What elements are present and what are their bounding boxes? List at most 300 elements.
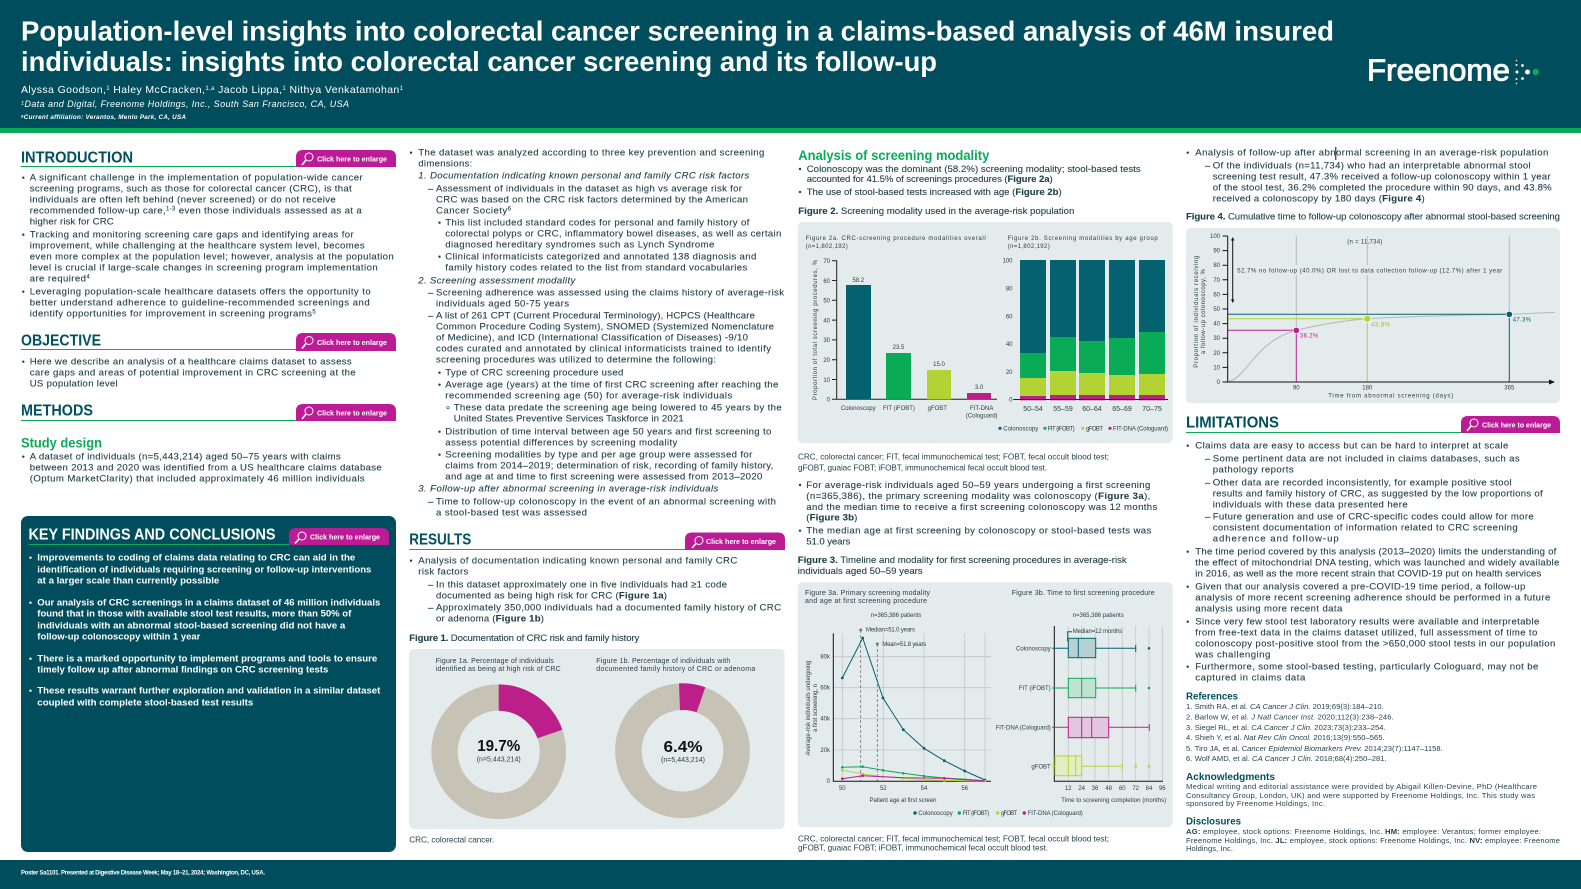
text: methods continued: Screening modalities by type and per age group were assessed for <box>445 450 753 461</box>
line chart: cumulative follow-up: 47.3% <box>1513 317 1532 323</box>
text: disclosures: AG: employee, stock options: Freenome Holdings, Inc. HM: employee: Verantos; former employee: <box>1186 827 1541 836</box>
line chart: cumulative follow-up: 40 <box>1213 322 1221 328</box>
authors: Nithya Venkatamohan <box>286 84 399 96</box>
note: figure 2 abbreviations <box>798 453 1109 472</box>
text: results bullets: or adenoma (Figure 1b) <box>436 614 544 625</box>
text: methods continued: recommended screening age (50) for average-risk individuals <box>445 391 733 402</box>
bar chart: figure 2a: 23.5 <box>893 345 905 351</box>
button: click here to enlarge (objective) <box>296 333 396 351</box>
text: limitations bullets: Future generation and use of CRC-specific codes could allow for more <box>1213 512 1534 523</box>
text: methods continued: screening procedures was utilized to determine the following: <box>436 355 716 366</box>
bar chart: figure 2a: 0 <box>827 398 831 404</box>
button: click here to enlarge (results) <box>685 532 785 550</box>
bar chart: figure 2a: 40 <box>823 318 831 324</box>
text: disclosures: Freenome Holdings, Inc. JL: employee, stock options: Freenome Holdings, Inc. NV: employee: Freenome <box>1186 836 1560 845</box>
text: limitations bullets: – <box>1205 512 1211 523</box>
line chart: figure 3a: Average-risk individuals undergoing <box>806 660 812 756</box>
caption: figure 1: Figure 1. Documentation of CRC risk and family history <box>409 633 640 644</box>
text: limitations bullets: – <box>1205 454 1211 465</box>
box plot: figure 3b <box>996 626 1166 804</box>
box plot: figure 3b: 24 <box>1078 786 1086 792</box>
line chart: cumulative follow-up: 60 <box>1213 292 1221 298</box>
text: limitations bullets: – <box>1205 478 1211 489</box>
subtitle: figure 2a <box>806 236 986 250</box>
caption: figure 4: Figure 4. Cumulative time to follow-up colonoscopy after abnormal stool-based screening <box>1186 212 1560 223</box>
text: introduction bullets: even those individuals assessed as at a <box>176 206 362 217</box>
note: figure 3 abbreviations: CRC, colorectal cancer; FIT, fecal immunochemical test; FOBT, fecal occult blood test; <box>798 834 1109 843</box>
text: key findings bullets: These results warrant further exploration and validation in a similar dataset <box>37 686 381 697</box>
text: introduction bullets: Tracking and monitoring screening care gaps and identifying areas for <box>30 230 354 241</box>
text: reference list: 1. <box>1186 702 1192 711</box>
text: key findings bullets: identification of individuals requiring screening or follow-up interventions <box>37 565 371 576</box>
text: key findings bullets: individuals with an abnormal stool-based screening did not have a <box>37 621 346 632</box>
text: methods continued: – <box>428 311 434 322</box>
title: individuals: insights into colorectal cancer screening and its follow-up <box>21 46 937 77</box>
text: methods continued: Clinical informaticists categorized and annotated 138 diagnosis and <box>445 252 756 263</box>
text: results bullets: – <box>428 603 434 614</box>
line chart: figure 3a: 54 <box>921 786 928 792</box>
text: methods continued: CRC was based on the CRC risk factors determined by the American <box>436 195 748 206</box>
button: click here to enlarge (results): Click here to enlarge <box>706 539 776 546</box>
box plot: figure 3b: 84 <box>1146 786 1153 792</box>
line chart: cumulative follow-up: 100 <box>1210 234 1221 240</box>
line chart: figure 3a: Mean=51.8 years <box>882 642 926 648</box>
donut chart: figure 1a: (n=5,443,214) <box>477 756 521 764</box>
text: methods continued: individuals aged 50-75 years <box>436 299 569 310</box>
legend: figure 3: Colonoscopy <box>918 811 953 817</box>
panel: key findings and conclusions <box>21 516 396 852</box>
line chart: figure 3a: 56 <box>961 786 969 792</box>
bar chart: figure 2a: 15.0 <box>933 362 945 368</box>
legend: figure 2: FIT-DNA (Cologuard) <box>1113 426 1168 432</box>
line chart: cumulative follow-up: 90 <box>1293 386 1300 392</box>
stacked bar chart: figure 2b: 40 <box>1006 342 1013 348</box>
text: follow-up bullets: Of the individuals (n=11,734) who had an interpretable abnormal stool <box>1213 161 1531 172</box>
stacked bar chart: figure 2b: 65–69 <box>1112 406 1132 413</box>
text: limitations bullets: adherence and follow-up <box>1213 534 1339 545</box>
text: reference list: 4. <box>1186 733 1192 742</box>
line chart: cumulative follow-up: 50 <box>1213 307 1221 313</box>
text: methods continued: dimensions: <box>418 159 472 170</box>
text: key findings bullets <box>29 553 381 709</box>
heading: Objective: OBJECTIVE <box>21 333 101 350</box>
text: introduction bullets: better understand adherence to guideline-recommended screenings and <box>30 298 370 309</box>
footer citation: Poster Sa1101. Presented at Digestive Disease Week; May 18–21, 2024; Washington, DC, USA. <box>21 870 265 876</box>
subheading: Analysis of screening modality: Analysis of screening modality <box>798 148 990 163</box>
legend: figure 3: gFOBT <box>1001 811 1017 817</box>
text: follow-up bullets <box>1186 147 1552 205</box>
box plot: figure 3b: Colonoscopy <box>1016 646 1051 652</box>
header banner <box>0 0 1581 133</box>
subtitle: figure 2a: (n=1,802,192) <box>806 244 848 250</box>
line chart: cumulative follow-up: 80 <box>1213 263 1221 269</box>
stacked bar chart: figure 2b: 60 <box>1006 314 1013 320</box>
text: limitations bullets: results and family history of CRC, as suggested by the low proportions of <box>1213 489 1543 500</box>
text: results bullets: documented as being high risk for CRC (Figure 1a) <box>436 591 667 602</box>
subtitle: figure 1a: identified as being at high risk of CRC <box>436 666 561 673</box>
note: figure 1 abbreviations: CRC, colorectal cancer. <box>409 835 494 844</box>
text: disclosures <box>1186 827 1560 853</box>
authors: Haley McCracken, <box>110 84 205 96</box>
heading: Introduction: INTRODUCTION <box>21 150 133 166</box>
subtitle: figure 1b: Figure 1b. Percentage of individuals with <box>596 658 730 665</box>
heading: key findings: KEY FINDINGS AND CONCLUSIONS <box>28 526 276 544</box>
text: introduction bullets: 1-3 <box>166 207 176 213</box>
box plot: figure 3b: FIT (iFOBT) <box>1019 686 1051 692</box>
box plot: figure 3b: gFOBT <box>1031 764 1051 770</box>
box plot: figure 3b: FIT-DNA (Cologuard) <box>996 725 1051 731</box>
text: methods continued: assess potential differences by screening modality <box>445 438 678 449</box>
stacked bar chart: figure 2b: 55–59 <box>1053 406 1073 413</box>
text: methods continued: Screening adherence was assessed using the claims history of average-risk <box>436 288 784 299</box>
line chart: cumulative follow-up: Proportion of individuals receiving <box>1194 256 1200 368</box>
line chart: figure 3a: Median=51.0 years <box>866 628 915 634</box>
text: methods continued: 6 <box>508 207 512 213</box>
caption: figure 3: Figure 3. Timeline and modality for first screening procedures in average-risk <box>798 555 1127 566</box>
line chart: figure 3a: a first screening, n <box>813 684 819 732</box>
box plot: figure 3b: Median=12 months <box>1073 629 1122 635</box>
bar chart: figure 2a: FIT (iFOBT) <box>883 406 915 412</box>
donut chart: figure 1b <box>628 683 737 805</box>
text: limitations bullets: The time period covered by this analysis (2013–2020) limits the understanding of <box>1195 547 1557 558</box>
heading: Results: RESULTS <box>409 532 472 549</box>
subtitle: figure 1a <box>436 658 561 673</box>
text: limitations bullets: Given that our analysis covered a pre-COVID-19 time period, a follow-up <box>1195 582 1525 593</box>
heading: Disclosures: Disclosures <box>1186 816 1241 828</box>
text: reference list <box>1186 702 1443 763</box>
bar chart: figure 2a: 50 <box>823 298 831 304</box>
bar chart: figure 2a: 20 <box>823 358 831 364</box>
subtitle: figure 1a: Figure 1a. Percentage of individuals <box>436 658 554 665</box>
box plot: figure 3b: 36 <box>1092 786 1099 792</box>
text: reference list: Tiro JA, et al. Cancer Epidemiol Biomarkers Prev. 2014;23(7):1147–1158. <box>1195 744 1443 753</box>
text: limitations bullets: the effect of mitochondrial DNA testing, which was launched and widely available <box>1195 558 1559 569</box>
text: limitations bullets: Some pertinent data are not included in claims databases, such as <box>1213 454 1520 465</box>
line chart: cumulative follow-up: 180 <box>1362 386 1373 392</box>
text: objective: US population level <box>30 379 118 390</box>
line chart: cumulative follow-up: 36.2% <box>1300 334 1319 340</box>
authors: 1 <box>282 86 286 92</box>
text: reference list: 6. <box>1186 754 1192 763</box>
line chart: figure 3a: 52 <box>880 786 887 792</box>
legend: figure 2: gFOBT <box>1086 426 1103 432</box>
affiliation: Data and Digital, Freenome Holdings, Inc., South San Francisco, CA, USA <box>24 99 349 109</box>
text: introduction bullets: Leveraging population-scale healthcare datasets offers the opportunity to <box>30 287 371 298</box>
text: follow-up bullets: – <box>1205 161 1211 172</box>
text: introduction bullets: 5 <box>312 310 316 316</box>
line chart: cumulative follow-up <box>1194 234 1555 400</box>
text: introduction bullets: identify opportunities for improvement in screening programs <box>30 309 312 320</box>
donut chart: figure 1a: 19.7% <box>477 738 520 755</box>
caption: figure 2: Figure 2. Screening modality used in the average-risk population <box>798 206 1074 217</box>
line chart: cumulative follow-up: 20 <box>1213 351 1221 357</box>
text: reference list: 5. <box>1186 744 1192 753</box>
authors: 1 <box>400 86 404 92</box>
line chart: cumulative follow-up: 30 <box>1213 336 1221 342</box>
text: limitations bullets <box>1186 441 1559 684</box>
text: results bullets: Approximately 350,000 individuals had a documented family history of CRC <box>436 603 781 614</box>
text: objective: care gaps and areas of potential improvement in CRC screening at the <box>30 368 356 379</box>
stacked bar chart: figure 2b: 20 <box>1006 370 1013 376</box>
heading: Limitations: LIMITATIONS <box>1186 414 1279 431</box>
text: introduction bullets: higher risk for CRC <box>30 217 114 228</box>
text: follow-up bullets: received a colonoscopy by 180 days (Figure 4) <box>1213 194 1425 205</box>
legend: figure 2 <box>998 426 1168 432</box>
text: introduction bullets: 4 <box>86 275 90 281</box>
legend: figure 3: FIT (iFOBT) <box>963 811 989 817</box>
text: methods continued: Cancer Society <box>436 206 507 217</box>
authors: Jacob Lippa, <box>215 84 282 96</box>
text: methods continued: codes curated and annotated by clinical informaticists trained to identify <box>436 344 771 355</box>
text: limitations bullets: analysis using more recent data <box>1195 604 1343 615</box>
text: modality bullets: accounted for 41.5% of screenings procedures (Figure 2a) <box>807 174 1053 185</box>
text: reference list: Wolf AMD, et al. CA Cancer J Clin. 2018;68(4):250–281. <box>1195 754 1387 763</box>
current affiliation: a <box>21 114 24 118</box>
line chart: figure 3a: 40k <box>820 716 831 722</box>
text: key findings bullets: Our analysis of CRC screenings in a claims dataset of 46 million individuals <box>37 598 380 609</box>
text: reference list: Siegel RL, et al. CA Cancer J Clin. 2023;73(3):233–254. <box>1195 723 1386 732</box>
text: results bullets: risk factors <box>418 567 469 578</box>
text: limitations bullets: pathology reports <box>1213 465 1294 476</box>
text: results bullets <box>410 556 781 625</box>
button: click here to enlarge (methods): Click here to enlarge <box>317 410 387 418</box>
text: study design: (Optum MarketClarity) that included approximately 46 million individuals <box>30 474 365 485</box>
text: follow-up bullets: of the stool test, 36.2% completed the procedure within 90 days, and 43.8% <box>1213 183 1552 194</box>
text: reference list: Smith RA, et al. CA Cancer J Clin. 2019;69(3):184–210. <box>1195 702 1384 711</box>
bar chart: figure 2a: 58.2 <box>852 278 865 284</box>
text: methods continued: colorectal polyps or CRC, inflammatory bowel diseases, as well as certain <box>445 229 781 240</box>
box plot: figure 3b: 12 <box>1065 786 1072 792</box>
text: limitations bullets: in 2016, as well as the more recent strain that COVID-19 put on health services <box>1195 569 1542 580</box>
text: methods continued: United States Preventive Services Taskforce in 2021 <box>454 414 684 425</box>
stacked bar chart: figure 2b: 0 <box>1009 398 1013 404</box>
text: first screening bullets: (n=365,386), the primary screening modality was colonoscopy (Figure 3a), <box>806 491 1150 502</box>
legend: figure 3 <box>913 811 1083 817</box>
caption: figure 3: individuals aged 50–59 years <box>798 566 923 577</box>
button: click here to enlarge (key findings) <box>289 528 389 545</box>
legend: figure 2: Colonoscopy <box>1003 426 1038 432</box>
text: first screening bullets: and the median time to receive a first screening colonoscopy was 12 months <box>806 502 1158 513</box>
text: methods continued: Type of CRC screening procedure used <box>445 368 623 379</box>
line chart: figure 3a: 60k <box>820 686 831 692</box>
text: study design: A dataset of individuals (n=5,443,214) aged 50–75 years with claims <box>30 452 341 463</box>
text: introduction bullets: recommended follow-up care, <box>30 206 166 217</box>
legend: figure 2: FIT (iFOBT) <box>1048 426 1075 432</box>
button: click here to enlarge (methods) <box>296 404 396 421</box>
title: Population-level insights into colorectal cancer screening in a claims-based analysis of 46M insured <box>21 16 1334 46</box>
text: methods continued: a stool-based test was assessed <box>436 508 587 519</box>
text: methods continued: of Medicine), and ICD (International Classification of Diseases) -9/10 <box>436 333 748 344</box>
text: first screening bullets: For average-risk individuals aged 50–59 years undergoing a first screening <box>806 480 1150 491</box>
heading: Methods: METHODS <box>21 403 93 420</box>
line chart: cumulative follow-up: Time from abnormal screening (days) <box>1328 394 1453 400</box>
text: reference list: 2. <box>1186 712 1192 722</box>
box plot: figure 3b: 96 <box>1159 786 1166 792</box>
box plot: figure 3b: 60 <box>1119 786 1126 792</box>
text: limitations bullets: analysis of more recent screening adherence should be performed in a future <box>1195 593 1550 604</box>
text: introduction bullets: screening programs, such as those for colorectal cancer (CRC), is that <box>30 184 352 195</box>
text: results bullets: – <box>428 580 434 591</box>
text: reference list: Shieh Y, et al. Nat Rev Clin Oncol. 2016;13(9):550–565. <box>1195 733 1385 742</box>
subtitle: figure 3a: Figure 3a. Primary screening modality <box>805 590 930 597</box>
text: limitations bullets: consistent documentation of information related to CRC screening <box>1213 523 1518 534</box>
text: follow-up bullets: Analysis of follow-up after abnormal screening in an average-risk population <box>1195 148 1548 159</box>
text: key findings bullets: coupled with complete stool-based test results <box>37 698 253 709</box>
legend: figure 3: FIT-DNA (Cologuard) <box>1028 811 1083 817</box>
subtitle: figure 2b <box>1008 236 1158 250</box>
panel: figure 3 <box>798 582 1173 827</box>
line chart: figure 3a: 20k <box>820 748 831 754</box>
text: key findings bullets: follow-up colonoscopy within 1 year <box>37 632 201 643</box>
text: modality bullets <box>799 164 1141 198</box>
text: first screening bullets <box>799 480 1158 548</box>
button: click here to enlarge (introduction) <box>296 150 396 167</box>
subheading: Study design: Study design <box>21 435 102 450</box>
subtitle: figure 3b: Figure 3b. Time to first screening procedure <box>1012 590 1155 597</box>
text: methods continued: The dataset was analyzed according to three key prevention and screening <box>418 148 764 159</box>
text: methods continued: – <box>428 184 434 195</box>
text: introduction bullets: level is crucial if large-scale changes in screening program implementation <box>30 263 378 274</box>
donut chart: figure 1a <box>444 684 562 806</box>
donut chart: figure 1b: (n=5,443,214) <box>661 757 705 764</box>
text: methods continued: 1. Documentation indicating known personal and family CRC risk factors <box>418 171 750 182</box>
text: methods continued: This list included standard codes for personal and family history of <box>445 218 750 229</box>
text: follow-up bullets: screening test result, 47.3% received a follow-up colonoscopy within 1 year <box>1213 172 1551 183</box>
text: modality bullets: The use of stool-based tests increased with age (Figure 2b) <box>807 187 1062 198</box>
text: methods continued: Common Procedure Coding System), SNOMED (Systemized Nomenclature <box>436 322 774 333</box>
subtitle: figure 3a: n=365,386 patients <box>871 613 921 619</box>
subtitle: figure 3b: n=365,386 patients <box>1073 613 1124 619</box>
text: methods continued: diagnosed hereditary syndromes such as Lynch Syndrome <box>445 240 714 251</box>
line chart: figure 3a: Patient age at first screen <box>870 798 936 804</box>
text: methods continued: These data predate the screening age being lowered to 45 years by the <box>454 403 782 414</box>
logo: Freenome: Freenome <box>1367 53 1510 88</box>
caption: figure 3 <box>798 555 1127 577</box>
subtitle: figure 3b <box>1012 590 1155 619</box>
text: study design: between 2013 and 2020 was identified from a US healthcare claims database <box>30 463 382 474</box>
line chart: figure 3a: 50 <box>839 786 846 792</box>
box plot: figure 3b: 48 <box>1105 786 1113 792</box>
bar chart: figure 2a: gFOBT <box>928 406 947 412</box>
text: reference list: Barlow W, et al. J Natl Cancer Inst. 2020;112(3):238–246. <box>1195 712 1394 722</box>
text: methods continued: Time to follow-up colonoscopy in the event of an abnormal screening with <box>436 497 776 508</box>
donut chart: figure 1b: 6.4% <box>664 739 703 756</box>
bar chart: figure 2a: (Cologuard) <box>966 414 998 420</box>
button: click here to enlarge (key findings): Click here to enlarge <box>310 534 380 542</box>
text: methods continued: family history codes related to the list from standard vocabularies <box>445 263 748 274</box>
text: methods continued: Distribution of time interval between age 50 years and first screening to <box>445 427 771 438</box>
stacked bar chart: figure 2b: 80 <box>1006 286 1013 292</box>
text: reference list: 3. <box>1186 723 1192 732</box>
text: methods continued: Average age (years) at the time of first CRC screening after reaching the <box>445 380 778 391</box>
text: methods continued: Assessment of individuals in the dataset as high vs average risk for <box>436 184 743 195</box>
text: limitations bullets: from free-text data in the claims dataset utilized, full assessment of time to <box>1195 628 1537 639</box>
line chart: figure 3a: 80k <box>820 654 831 660</box>
line chart: cumulative follow-up: 43.8% <box>1371 323 1391 329</box>
text: limitations bullets: Since very few stool test laboratory results were available and interpretable <box>1195 617 1539 628</box>
subtitle: figure 1b <box>596 658 755 673</box>
text: key findings bullets: timely follow up after abnormal findings on CRC screening tests <box>37 665 328 676</box>
panel: figure 4 <box>1186 228 1560 403</box>
title <box>21 16 1334 77</box>
text: introduction bullets: individuals are often left behind (never screened) or do not receive <box>30 195 336 206</box>
text: introduction bullets: even more complex at the population level; however, analysis at the population <box>30 252 394 263</box>
text: limitations bullets: captured in claims data <box>1195 673 1306 684</box>
text: limitations bullets: colonoscopy post-positive stool from the >650,000 stool tests in our population <box>1195 639 1555 650</box>
text: modality bullets: Colonoscopy was the dominant (58.2%) screening modality; stool-based tests <box>807 164 1141 175</box>
affiliation: 1 <box>21 101 24 107</box>
line chart: cumulative follow-up: (n = 11,734) <box>1347 240 1382 246</box>
text: methods continued: and age at and time to first screening were assessed from 2013–2020 <box>445 472 762 483</box>
panel: figure 2 <box>798 222 1173 443</box>
line chart: cumulative follow-up: 70 <box>1213 278 1221 284</box>
line chart: cumulative follow-up: 90 <box>1213 249 1221 255</box>
text: acknowledgments: Consultancy Group, London, UK) and were supported by Freenome Holdings, Inc. This study was <box>1186 791 1535 800</box>
text: objective: Here we describe an analysis of a healthcare claims dataset to assess <box>30 357 352 368</box>
text: objective <box>22 357 356 390</box>
authors: Alyssa Goodson, <box>21 84 106 96</box>
note: figure 3 abbreviations <box>798 834 1109 852</box>
panel: figure 1 <box>409 649 784 829</box>
line chart: cumulative follow-up: 10 <box>1213 365 1221 371</box>
heading: Acknowledgments: Acknowledgments <box>1186 772 1275 783</box>
line chart: cumulative follow-up: 52.7% no follow-up (40.0%) OR lost to data collection follow-up (12.7%) after 1 year <box>1237 269 1502 275</box>
text: first screening bullets: 51.0 years <box>806 537 851 548</box>
text: introduction bullets: are required <box>30 274 86 285</box>
button: click here to enlarge (objective): Click here to enlarge <box>317 340 387 347</box>
bar chart: figure 2a: 10 <box>823 378 831 384</box>
text: acknowledgments <box>1186 782 1537 808</box>
text: results bullets: In this dataset approximately one in five individuals had ≥1 code <box>436 580 727 591</box>
authors: 1,a <box>205 86 215 92</box>
text: introduction bullets: A significant challenge in the implementation of population-wide cancer <box>30 173 363 184</box>
subtitle: figure 1b: documented family history of CRC or adenoma <box>596 666 755 673</box>
bar chart: figure 2a: Colonoscopy <box>841 406 876 412</box>
line chart: cumulative follow-up: 0 <box>1217 380 1221 386</box>
authors: 1 <box>106 86 110 92</box>
line chart: figure 3a <box>806 628 991 804</box>
subtitle: figure 3a: and age at first screening procedure <box>805 598 927 605</box>
stacked bar chart: figure 2b: 50–54 <box>1023 406 1043 413</box>
box plot: figure 3b: Time to screening completion (months) <box>1061 798 1166 804</box>
text: limitations bullets: Claims data are easy to access but can be hard to interpret at scale <box>1195 441 1508 452</box>
bar chart: figure 2a: Proportion of total screening procedures, % <box>813 259 819 400</box>
button: click here to enlarge (introduction): Click here to enlarge <box>317 156 387 164</box>
line chart: figure 3a: 0 <box>827 779 831 785</box>
stacked bar chart: figure 2b: 70–75 <box>1142 406 1162 413</box>
text: key findings bullets: at a larger scale than currently possible <box>37 576 219 587</box>
button: click here to enlarge (limitations): Click here to enlarge <box>1482 422 1551 430</box>
text: limitations bullets: Furthermore, some stool-based testing, particularly Cologuard, may not be <box>1195 662 1538 673</box>
text: key findings bullets: found that in those with available stool test results, more than 50% of <box>37 609 352 620</box>
note: figure 2 abbreviations: gFOBT, guaiac FOBT; iFOBT, immunochemical fecal occult blood test. <box>798 463 1047 472</box>
current affiliation: Current affiliation: Verantos, Menlo Park, CA, USA <box>24 114 186 121</box>
note: figure 3 abbreviations: gFOBT, guaiac FOBT; iFOBT, immunochemical fecal occult blood test. <box>798 843 1048 852</box>
subtitle: figure 2b: (n=1,802,192) <box>1008 244 1050 250</box>
text: methods continued: 2. Screening assessment modality <box>417 276 577 287</box>
text: study design <box>22 452 382 485</box>
text: limitations bullets: individuals with these data presented here <box>1213 500 1408 511</box>
stacked bar chart: figure 2b: 100 <box>1002 258 1013 264</box>
text: limitations bullets: was challenging <box>1194 650 1270 661</box>
subtitle: figure 3a <box>805 590 930 619</box>
subtitle: figure 2a: Figure 2a. CRC-screening procedure modalities overall <box>806 236 986 242</box>
bar chart: figure 2a: 60 <box>823 279 831 285</box>
bar chart: figure 2a: FIT-DNA <box>970 406 993 412</box>
line chart: cumulative follow-up: 365 <box>1504 386 1515 392</box>
text: methods continued: – <box>428 497 434 508</box>
text: methods continued <box>410 148 784 519</box>
